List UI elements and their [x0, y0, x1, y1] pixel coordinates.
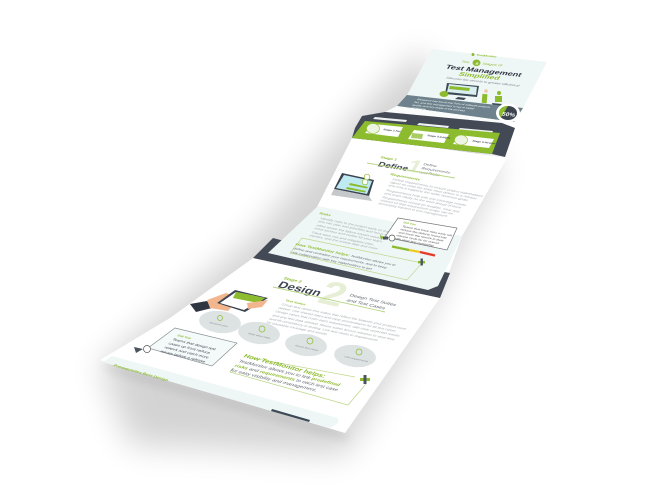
phase pill: Set Up: Stage 1 Set [383, 128, 402, 133]
phase pill: Set Up [365, 124, 403, 137]
heading: Stage 2 [282, 276, 303, 284]
callout: did you know: with clear test ownership [393, 237, 435, 247]
callout: how testmonitor helps [290, 238, 425, 280]
callout: how testmonitor helps [229, 354, 370, 405]
info circle 2: Write clear steps [248, 332, 272, 340]
heading subtitle: and Test Cases [345, 298, 387, 311]
requirements text: agree on what the team must deliver in a release [389, 181, 478, 200]
callout: did you know [380, 218, 457, 250]
callout: how testmonitor helps: TestMonitor allows you to link predefined [237, 359, 341, 388]
info circle 4: Link requirements [344, 355, 370, 363]
requirements text: Requirements should be testable, clear and [381, 196, 460, 213]
callout: did you know: release cycle by far overall [395, 234, 440, 245]
design body text: for traceable coverage and results [265, 321, 328, 336]
requirements text: shared so that requirement scope can be [379, 199, 454, 215]
design body text [265, 299, 407, 342]
big number 2: 2 [312, 274, 354, 314]
callout: how testmonitor helps: How TestMonitor helps: TestMonitor allows you to [294, 242, 397, 267]
design body text: Design cases that cover each requirement, with clear expected results [274, 310, 401, 338]
callout: did you know: issues before a release [159, 349, 208, 363]
info circle 4 [333, 343, 377, 369]
panel: execution phases [352, 121, 500, 154]
callout: did you know: Teams that design test [171, 337, 218, 351]
design body text: and lift consistency in testing. Link test cases to requirements [268, 318, 379, 342]
requirements text: and how it supports the wider business goals [387, 184, 469, 202]
white strip below band [385, 106, 514, 123]
design body text: deliver. Use shared steps and clear preconditions for all test cases [277, 307, 397, 333]
info circle 3: Reuse test cases [295, 344, 320, 352]
title: Test Management [444, 64, 524, 78]
heading subtitle: Define [422, 162, 439, 168]
callout: did you know: Did You [176, 334, 192, 340]
icon: megaphone clock [134, 346, 150, 353]
heading subtitle: and Risks [418, 170, 441, 177]
heading subtitle [418, 162, 452, 177]
info circle 1: Structure your [209, 321, 229, 328]
risks text: effort where the failure impact would be [315, 224, 387, 241]
dark section band [253, 238, 450, 298]
title: Simplified [457, 71, 502, 81]
panel: header [407, 49, 547, 108]
callout: how testmonitor helps: for easy visibility and management. [229, 368, 318, 393]
design body text: Test Suites [284, 299, 307, 306]
requirements text: Define requirements to ensure project stakeholders [391, 178, 484, 198]
panel: stage 1 define [331, 155, 484, 218]
dark tab [271, 409, 310, 422]
label: execution phase: Execution Phase [408, 146, 441, 153]
risks text: most serious and visible for your team. [313, 227, 384, 243]
risks text [308, 212, 391, 250]
logo: TestMonitor [476, 53, 498, 58]
requirements text: Requirements [389, 172, 422, 181]
info circle 3 [284, 332, 328, 358]
grey intro band: quality at every stage of the process [412, 104, 467, 112]
page base [100, 136, 507, 433]
panel: stage 2 design [134, 274, 407, 405]
title: 6 [475, 62, 480, 66]
panel: risks [268, 206, 462, 290]
panel: stage 1 define: Define [376, 160, 411, 172]
phase pill: Review [453, 135, 498, 148]
grey intro band [397, 95, 523, 122]
title: The [461, 60, 472, 64]
callout: how testmonitor helps: risks and requirements to each test case [233, 364, 339, 393]
badge: 50 percent: 50% [501, 112, 516, 119]
design body text: and any test data needed. Reuse suites across releases to save time [271, 314, 396, 341]
icon: plus badge [418, 258, 425, 266]
white tabs [373, 117, 407, 122]
footer panel [103, 356, 338, 428]
risks text: Track each risk and mitigation plan, [310, 231, 375, 246]
grey intro band: fail, and test management is key to better [414, 101, 475, 110]
requirements text: and team clarity on the work ahead of them [383, 192, 462, 209]
info circle 1 [198, 309, 242, 335]
page shadow [100, 50, 500, 455]
panel: stage 2 design: Design [275, 280, 324, 298]
icon: laptop [331, 173, 374, 201]
title: Stages of [482, 62, 504, 67]
icon: hand holding phone [190, 290, 268, 312]
callout: did you know: Did You [402, 221, 417, 226]
heading: Stage 1 [379, 155, 399, 161]
big number 1: 1 [403, 156, 427, 177]
callout: did you know: rework and catch more [163, 345, 211, 359]
callout: how testmonitor helps: risk collaboration with key stakeholders to get [290, 251, 373, 271]
risks text: Risks [318, 212, 332, 217]
phase pill: Insight: Stage 3 Insight [427, 134, 451, 139]
phase pill: Review: Stage 5 Review [472, 139, 498, 145]
risks text: owners, and the review date and more [308, 234, 379, 250]
callout: did you know: cases up front reduce [167, 341, 213, 355]
risks text: Identify risks to the project early so that [319, 217, 391, 234]
subtitle: Discover the secrets to greater efficiency! [446, 76, 521, 87]
risks text: you can plan test priorities and focus the [317, 220, 391, 237]
callout: did you know [134, 328, 237, 366]
grey intro band: Research has found that 50% of software projects [417, 98, 492, 109]
callout: did you know: and lower the rework in their [397, 231, 446, 242]
heading subtitle: Design Test Suites [348, 293, 398, 308]
info circle 2 [237, 320, 281, 346]
callout: how testmonitor helps: How TestMonitor helps: [242, 354, 327, 379]
requirements text [377, 172, 484, 218]
requirements text: accurately tracked in test management [377, 202, 448, 218]
icon: megaphone clock [380, 235, 395, 241]
title [444, 60, 524, 81]
footer panel: Prerequisites Best Design [112, 363, 170, 382]
heading subtitle: Requirements [420, 166, 452, 174]
callout: how testmonitor helps: define and centralize your requirements, and to keep [292, 247, 388, 269]
requirements text: Requirements help with test coverage results [385, 189, 467, 207]
phase pill: Insight [408, 130, 451, 143]
design body text: Group test cases into suites that reflect the features your product must [280, 303, 407, 331]
icon: plus badge [360, 375, 370, 384]
dark fold band [352, 112, 515, 157]
callout: did you know: reduce the defects found late [399, 228, 448, 239]
callout: did you know: Teams that track risks early will [401, 225, 453, 237]
grey intro band: of release [411, 106, 427, 111]
risk gauge [392, 246, 435, 256]
badge: 50 percent [496, 104, 520, 122]
illustration: monitor and people [440, 83, 502, 106]
